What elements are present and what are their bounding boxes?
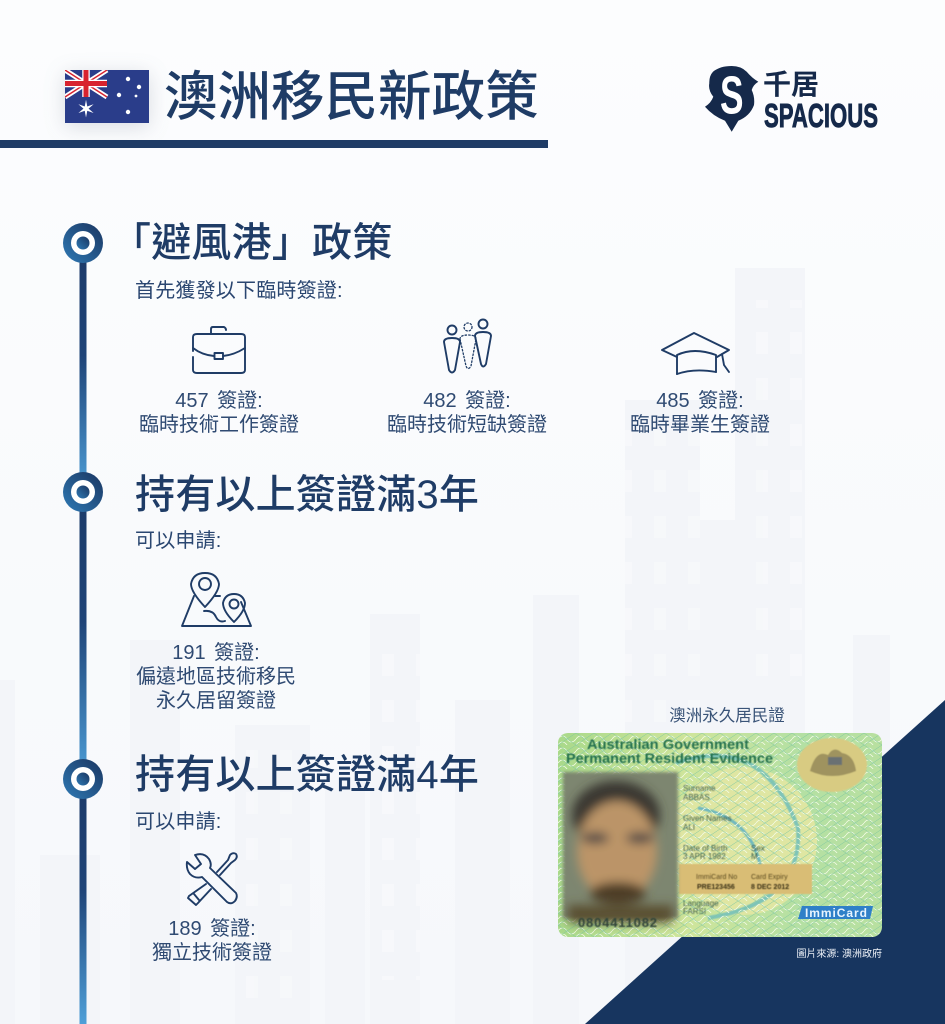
label: 457 visa [139,390,299,436]
image: permanent resident card: 8 DEC 2012 [751,884,789,891]
icon: S location pin [705,66,758,132]
image: permanent resident card [558,733,882,937]
text: image source: 圖片來源: 澳洲政府 [796,949,882,960]
logo: Spacious [705,66,878,132]
card heading lines: Permanent Resident Evidence [566,751,774,766]
image: permanent resident card: ALI [683,823,695,832]
logo text: 千居: 千居 [763,69,819,100]
caption: permanent resident card: 澳洲永久居民證 [669,707,785,725]
label: 189 visa: 189 簽證: [168,918,256,940]
label: 191 visa [136,642,296,712]
icon: S location pin: S [720,66,744,126]
title: 澳洲移民新政策 [164,68,538,127]
text: first obtain: 首先獲發以下臨時簽證: [135,280,343,302]
label: 482 visa: 臨時技術短缺簽證 [387,414,547,436]
heading: 4 years: 持有以上簽證滿4年 [135,753,479,797]
label: 485 visa: 臨時畢業生簽證 [630,414,770,436]
icon: graduation cap [661,332,730,375]
label: 191 visa: 191 簽證: [172,642,260,664]
image: permanent resident card: Given Names [683,814,731,823]
logo: ImmiCard: ImmiCard [805,906,867,920]
icon: briefcase [192,326,246,374]
card heading lines [566,738,774,764]
label: 191 visa: 永久居留簽證 [156,690,276,712]
image: permanent resident card: Date of Birth [683,844,727,853]
card heading lines: Australian Government [587,737,750,752]
label: 189 visa: 獨立技術簽證 [152,942,272,964]
icon: map with pins [181,572,252,627]
label: 482 visa: 482 簽證: [423,390,511,412]
label: 189 visa [152,918,272,964]
image: permanent resident card: M [751,852,758,861]
text: can apply 1: 可以申請: [135,530,222,552]
timeline [63,223,103,1024]
label: 457 visa: 457 簽證: [175,390,263,412]
image: permanent resident card: ImmiCard No [696,874,737,881]
label: 482 visa [387,390,547,436]
image: permanent resident card: Card Expiry [751,874,788,881]
icon: Australian flag: ✶ [76,97,96,123]
text: can apply 2: 可以申請: [135,811,222,833]
corner: navy triangle [585,700,945,1024]
image: permanent resident card: PRE123456 [697,884,735,891]
icon: Australian flag [58,67,156,134]
icon: people with missing person [443,318,492,374]
image: permanent resident card: Sex [751,844,765,853]
image: permanent resident card: Surname [683,784,716,793]
heading: 3 years: 持有以上簽證滿3年 [135,473,479,517]
timeline node 1 [63,223,103,263]
header [0,67,548,148]
label: 191 visa: 偏遠地區技術移民 [136,666,296,688]
image: permanent resident card: ABBAS [683,793,710,802]
image: permanent resident card: 3 APR 1982 [683,852,726,861]
image: permanent resident card: 0804411082 [578,915,657,930]
label: 485 visa [630,390,770,436]
heading: safe harbour policy: 「避風港」政策 [111,221,392,265]
image: permanent resident card: FARSI [683,907,706,916]
icon: wrench and screwdriver [186,852,238,906]
timeline node 3 [63,759,103,799]
label: 485 visa: 485 簽證: [656,390,744,412]
image: permanent resident card: Language [683,899,719,908]
timeline node 2 [63,472,103,512]
title rule [0,140,548,148]
photo: blurred face [563,772,678,923]
label: 457 visa: 臨時技術工作簽證 [139,414,299,436]
